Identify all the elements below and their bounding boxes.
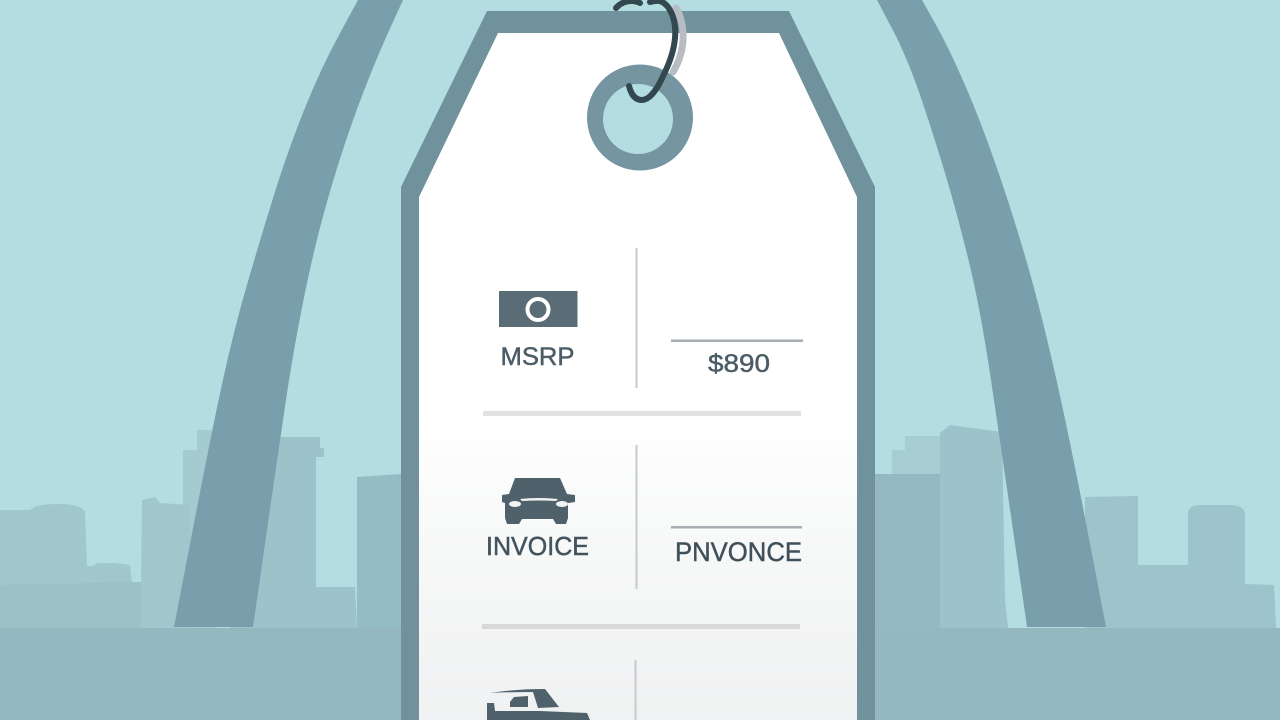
skyline: right (875, 425, 1276, 640)
vertical divider 2 (636, 445, 638, 589)
ground band (0, 628, 1280, 720)
arch: right leg (877, 0, 1106, 627)
invoice value: PNVONCE (675, 537, 802, 567)
icon: car front (502, 478, 575, 524)
vertical divider 3 (634, 660, 636, 720)
row 3: vehicle icon (487, 689, 590, 720)
label: MSRP: MSRP (500, 343, 574, 371)
skyline: left (0, 430, 401, 628)
price value: $890 (708, 350, 770, 378)
price value (671, 340, 803, 378)
vertical divider 1 (636, 248, 638, 388)
icon: banknote (499, 291, 578, 327)
arch: left leg (174, 0, 403, 627)
string (616, 1, 683, 100)
label: INVOICE: INVOICE (486, 531, 589, 561)
price tag (401, 1, 875, 720)
horizontal divider 2 (482, 624, 800, 629)
tag border (401, 11, 875, 720)
tag face (419, 33, 857, 720)
row 2 (486, 478, 802, 567)
tag hole ring (587, 64, 693, 170)
horizontal divider 1 (483, 411, 801, 416)
invoice value (671, 526, 802, 567)
row 1 (499, 291, 803, 378)
